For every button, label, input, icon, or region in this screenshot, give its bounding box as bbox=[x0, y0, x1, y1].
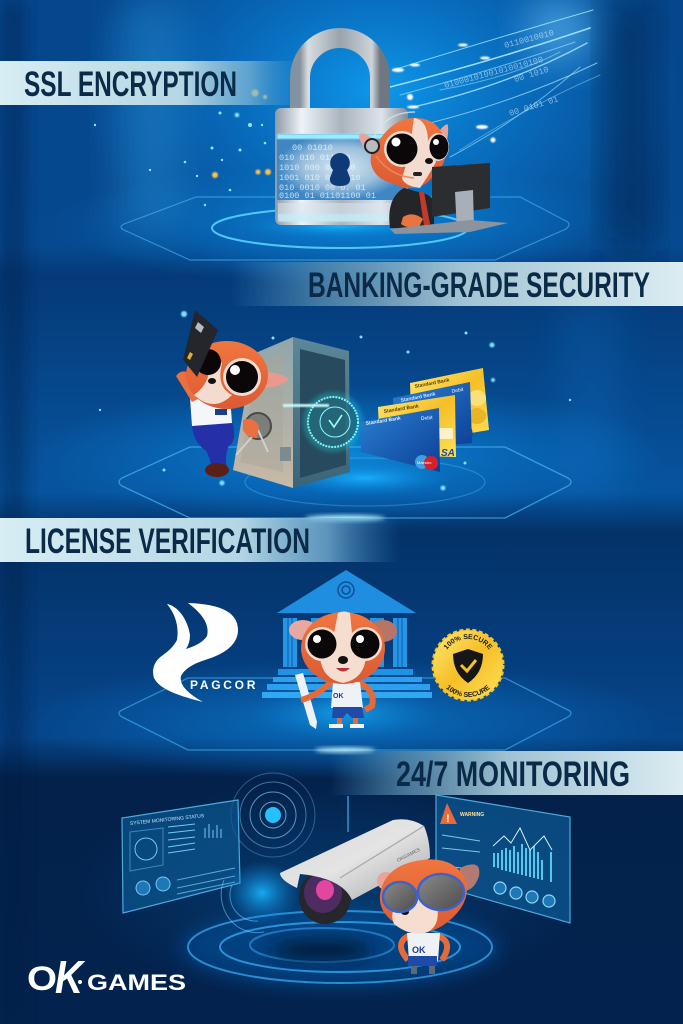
check mark bbox=[461, 660, 476, 671]
blue card front: Debit bbox=[421, 415, 433, 422]
blue card middle: Debit bbox=[451, 387, 464, 395]
headset bbox=[370, 112, 415, 148]
gold seal bbox=[433, 630, 503, 700]
trousers and shoe bbox=[192, 421, 234, 474]
OK Games logo: K bbox=[55, 951, 85, 1003]
camera housing bbox=[280, 819, 430, 900]
temple bbox=[262, 570, 432, 698]
mascot: card holder bbox=[176, 310, 289, 477]
lens bbox=[299, 870, 351, 924]
PAGCOR wordmark: PAGCOR bbox=[190, 678, 256, 692]
shackle bbox=[300, 38, 380, 112]
head bbox=[186, 341, 268, 409]
glass panel bbox=[277, 134, 406, 200]
data streams: 00 0101 01 bbox=[508, 94, 560, 119]
dashboard widgets bbox=[130, 824, 235, 895]
line chart bbox=[493, 828, 552, 850]
stacked bank cards bbox=[361, 368, 489, 472]
binary text: 0100 01 01101100 01 bbox=[279, 191, 376, 201]
pen bbox=[295, 673, 317, 729]
platform: section 1 bbox=[121, 197, 569, 260]
blue card middle: Standard Bank bbox=[400, 391, 436, 404]
roof bbox=[277, 570, 416, 613]
dashboard title: SYSTEM MONITORING STATUS bbox=[130, 813, 205, 827]
panel: right dashboard: ! bbox=[446, 813, 450, 825]
ears bbox=[459, 864, 479, 891]
curved label: 100% SECURE bbox=[444, 634, 493, 650]
safe door bbox=[293, 337, 350, 488]
gold card front: Standard Bank bbox=[383, 403, 419, 415]
radar rings bbox=[231, 773, 348, 857]
combination wheel bbox=[245, 413, 271, 439]
sunglasses bbox=[383, 874, 464, 912]
security camera: OKGAMES bbox=[396, 847, 422, 864]
platform: section 2 bbox=[119, 447, 571, 521]
arms bbox=[301, 680, 373, 710]
shirt bbox=[190, 386, 232, 426]
shorts and legs bbox=[332, 707, 364, 718]
floor rings bbox=[180, 908, 500, 988]
panel: right dashboard bbox=[436, 795, 570, 923]
operator body bbox=[389, 188, 434, 228]
ears bbox=[359, 133, 377, 156]
head bbox=[380, 859, 467, 933]
blue card middle bbox=[393, 382, 472, 450]
mascot: sunglasses: OK bbox=[412, 945, 426, 955]
computer monitor bbox=[390, 163, 508, 234]
eyes bbox=[195, 349, 261, 396]
safe side bbox=[233, 337, 293, 488]
particles: section 2 bbox=[99, 311, 571, 490]
binary text: 00 01010 bbox=[292, 143, 333, 153]
visa marks: SA bbox=[441, 448, 455, 459]
blue card front: Maestro bbox=[417, 460, 432, 465]
side readouts bbox=[442, 835, 480, 870]
visa marks: SA bbox=[460, 428, 474, 439]
roof target icon bbox=[338, 582, 354, 598]
binary text bbox=[279, 143, 376, 201]
bar chart bbox=[493, 844, 552, 882]
mascot: pen holder bbox=[289, 612, 397, 729]
digital shield dial bbox=[303, 392, 363, 452]
panel: left dashboard bbox=[122, 800, 240, 913]
shirt bbox=[407, 933, 440, 961]
binary text: 1001 010 0011 10 bbox=[279, 173, 361, 183]
binary text: 1010 000 010. 0 bbox=[279, 163, 356, 173]
data streams: 01000101001010010100 bbox=[443, 55, 544, 91]
raised arm bbox=[176, 371, 200, 402]
blue card front: Standard Bank bbox=[365, 415, 401, 427]
head bbox=[301, 612, 385, 684]
shorts and legs bbox=[408, 956, 437, 966]
shield bbox=[453, 649, 483, 683]
security camera bbox=[221, 819, 430, 933]
mascot: sunglasses bbox=[377, 859, 479, 974]
padlock bbox=[275, 38, 408, 225]
platform: section 3 bbox=[119, 678, 571, 752]
steps bbox=[262, 669, 432, 698]
curved label bottom: 100% SECURE bbox=[446, 684, 490, 698]
PAGCOR swoosh bbox=[153, 603, 238, 702]
alert text: WARNING bbox=[460, 812, 484, 818]
mascot: headset operator bbox=[359, 112, 508, 234]
OK Games logo: O bbox=[27, 960, 57, 998]
visa marks bbox=[441, 428, 474, 459]
data streams bbox=[390, 10, 600, 157]
lock body bbox=[275, 108, 408, 225]
camera beam bbox=[224, 861, 300, 925]
data streams: 0110010010 bbox=[503, 28, 555, 51]
section heading: License Verification: LICENSE VERIFICATION bbox=[25, 522, 310, 561]
eyes bbox=[305, 627, 382, 672]
mascot: pen holder: OK bbox=[333, 693, 344, 700]
status icons bbox=[494, 882, 555, 907]
arms bbox=[401, 936, 447, 960]
eyes bbox=[384, 131, 449, 167]
data streams: 00 1010 bbox=[513, 65, 550, 85]
shirt bbox=[331, 682, 363, 708]
hand on dial bbox=[243, 419, 259, 438]
particles: section 1 bbox=[94, 90, 271, 206]
binary text: 010 010 011 10 bbox=[279, 153, 350, 163]
section heading: SSL Encryption: SSL ENCRYPTION bbox=[24, 65, 237, 104]
bank card bbox=[183, 310, 218, 377]
keyhole bbox=[330, 153, 350, 186]
OK Games logo: GAMES bbox=[87, 970, 186, 995]
ears bbox=[289, 620, 317, 640]
columns bbox=[283, 618, 407, 667]
binary text: 010 0010 00 0. 01 bbox=[279, 183, 366, 193]
safe bbox=[233, 337, 363, 488]
PAGCOR logo bbox=[153, 603, 256, 702]
warning icon bbox=[440, 803, 457, 824]
100% secure badge bbox=[432, 628, 504, 702]
gold card back: Standard Bank bbox=[414, 377, 450, 390]
head bbox=[371, 118, 446, 188]
ear bbox=[262, 372, 289, 387]
OK Games logo bbox=[27, 951, 186, 1003]
blue card front bbox=[361, 408, 440, 472]
